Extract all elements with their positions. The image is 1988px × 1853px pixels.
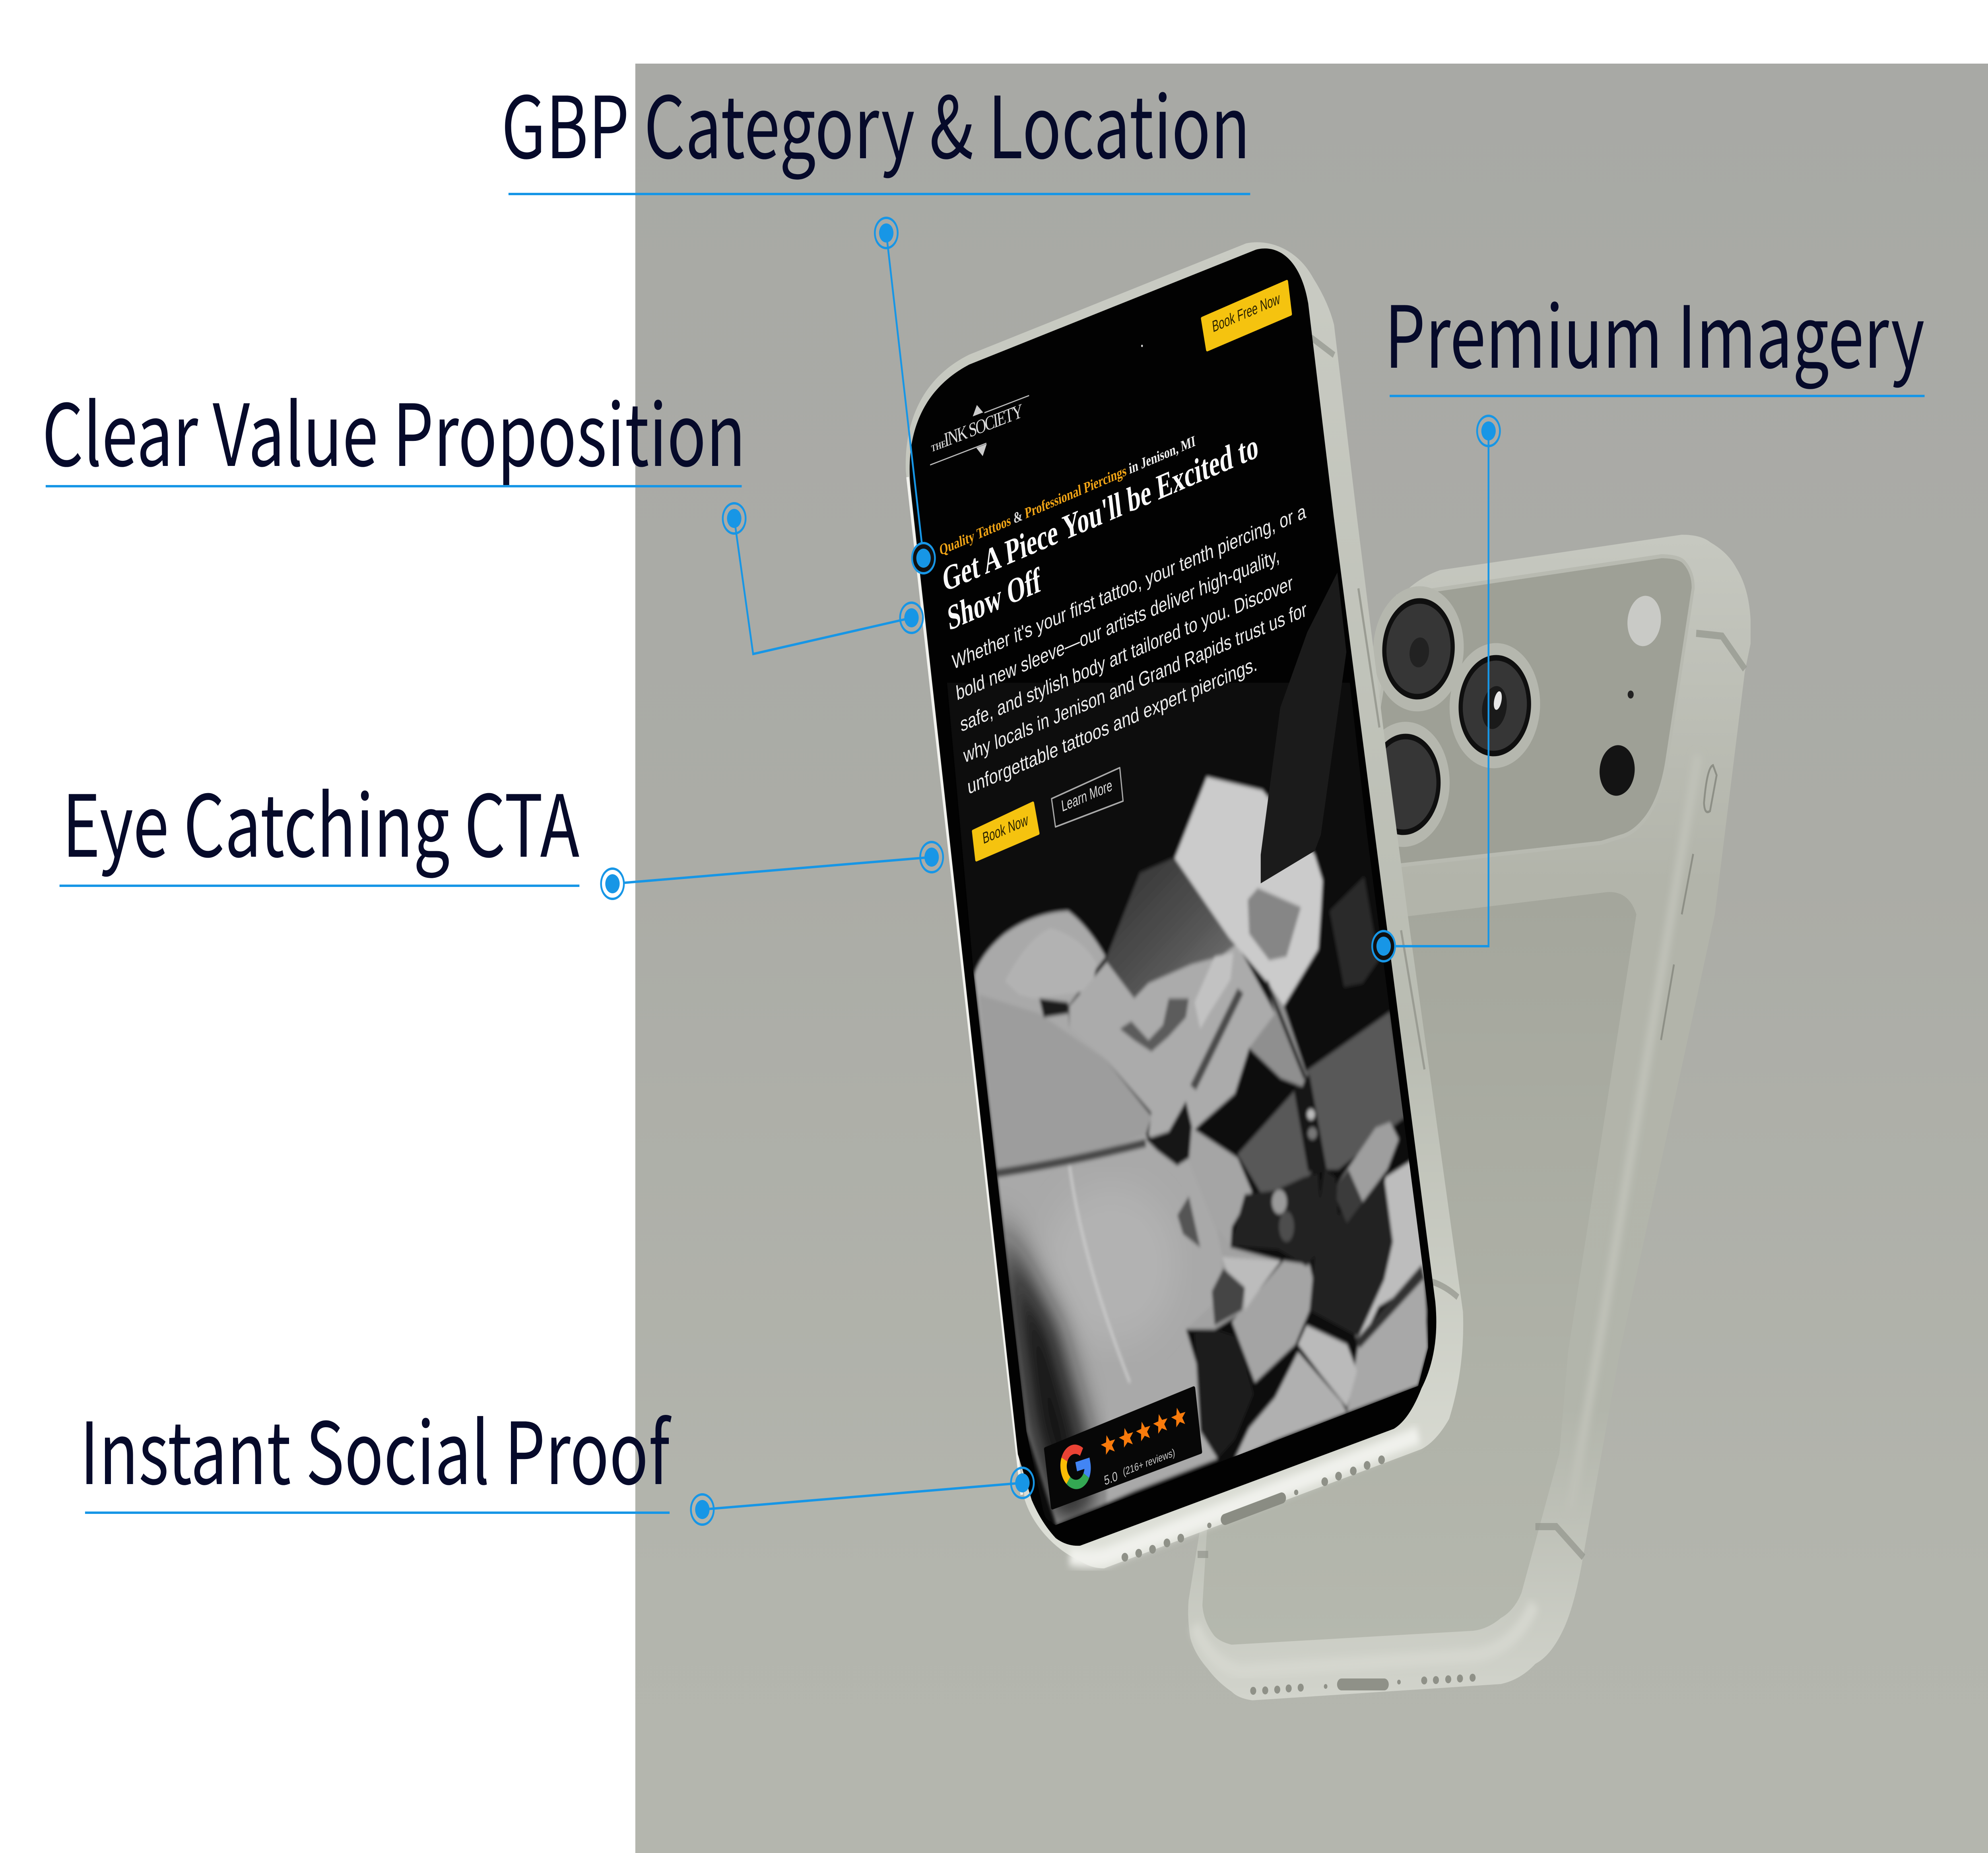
marker end [900,603,923,633]
front phone [906,242,1463,1568]
hoodie [974,911,1222,1525]
paragraph line 1: Whether it's your first tattoo, your tenth piercing, or a [951,499,1307,674]
marker end [912,543,935,573]
screen [910,248,1436,1546]
glove highlight [1272,1190,1287,1214]
callout: premium imagery [1372,269,1925,961]
antenna band [1311,338,1458,1297]
front phone frame [906,242,1463,1568]
logo rules [927,396,1033,465]
left frame highlight [908,477,1022,1495]
side button [1358,588,1379,728]
heading: premium imagery: Premium Imagery [1384,269,1925,392]
google review badge [1046,1388,1201,1508]
paragraph line 5: unforgettable tattoos and expert piercings. [966,652,1258,799]
hero paragraph [951,499,1308,799]
cap [1175,777,1322,1006]
hoodie seam [1070,1166,1130,1383]
table lower [1347,1276,1428,1413]
hero heading line 1: Get A Piece You'll be Excited to [940,426,1260,600]
marker end [920,842,943,872]
heading: GBP category and location: GBP Category & Location [501,59,1250,183]
paragraph line 3: safe, and stylish body art tailored to you. Discover [959,571,1294,736]
marker end [1372,931,1395,961]
button: book now [973,803,1038,860]
back phone body [1188,535,1751,1700]
button: book now: Book Now [982,811,1029,848]
collar gap [1039,998,1068,1017]
cord highlights [1307,1109,1315,1120]
camera dot [1141,345,1143,347]
connector line [702,1483,1022,1510]
heading: eye catching CTA: Eye Catching CTA [62,758,579,881]
tattoo machine [1337,1122,1399,1223]
marker start [691,1494,714,1525]
right frame highlight [1570,755,1698,1511]
ear [1194,953,1233,1029]
cups [1330,877,1378,987]
client arm [1232,1261,1314,1383]
underline [60,885,579,887]
back phone [1188,535,1751,1700]
sleeve [1189,1128,1252,1248]
hood fold line [996,1143,1145,1173]
machine grip [1337,1170,1363,1223]
shirt [1180,1162,1281,1329]
callout: eye catching CTA [60,758,943,899]
heading: instant social proof: Instant Social Proof [80,1385,672,1509]
camera plateau [1352,556,1693,871]
lower frame highlight [1195,1604,1534,1672]
cap logo [1248,888,1301,960]
eyebrow text: Quality Tattoos & Professional Piercings in Jenison, MI [939,433,1196,559]
callout: clear value proposition [42,367,923,654]
jaw tattoo [1193,991,1241,1088]
black arm of machine [1261,572,1346,883]
black sensor [1595,739,1639,801]
floor [1238,1012,1406,1192]
rating text: 5.0 [1103,1469,1118,1488]
front speaker and port [1122,1455,1385,1562]
connector line [612,857,932,884]
background panel [635,64,1988,1853]
lower sleeve [1235,1352,1347,1459]
hair [1105,858,1238,998]
button: learn more [1052,768,1123,827]
callout: GBP category and location [501,59,1250,573]
badge box [1046,1388,1201,1508]
back glass panel [1202,892,1637,1645]
marker start [875,218,898,248]
marker end [1011,1468,1034,1498]
five stars [1099,1405,1188,1456]
black cuff [1194,1329,1254,1459]
hoodie body highlight [1045,1185,1177,1345]
marker start [723,503,746,534]
paragraph line 4: why locals in Jenison and Grand Rapids trust us for [962,598,1308,767]
lens top [1362,572,1475,726]
shirt print [1177,1196,1200,1248]
bottom frame highlight [1070,1435,1419,1558]
heading: clear value proposition: Clear Value Proposition [42,367,746,491]
connector line [734,518,912,654]
button: book free now [1202,281,1291,350]
light shirt patch [1222,1257,1281,1310]
hero heading line 2: Show Off [945,560,1043,638]
review count: (216+ reviews) [1122,1446,1176,1479]
google logo [1061,1446,1091,1488]
beard [1145,1101,1193,1166]
table stripe [1355,1265,1425,1348]
cap bill edge [1266,981,1305,1078]
flash [1623,590,1666,652]
callout: instant social proof [80,1385,1034,1525]
window shape [967,424,1264,926]
connector line [886,233,924,558]
right glove [1310,1170,1393,1337]
dim studio background [933,531,1428,1525]
neck and face skin [1070,945,1275,1147]
back speaker and port [1250,1674,1475,1695]
marker start [1477,416,1500,446]
underline [85,1512,670,1514]
left glove [1231,1173,1321,1267]
antenna bands [1198,633,1745,1557]
button: learn more: Learn More [1060,776,1113,815]
microphone [1628,691,1634,699]
paragraph line 2: bold new sleeve—our artists deliver high-quality, [955,543,1281,705]
logo wordmark: INK SOCIETY [943,399,1024,451]
side buttons [1661,765,1716,1040]
logo small word: THE [931,438,947,454]
neck tattoo [1120,998,1189,1052]
machine cord [1294,1075,1327,1173]
lens middle [1439,629,1551,782]
logo [926,385,1034,476]
connector line [1384,431,1489,946]
hoodie dark shadow [996,1215,1097,1525]
hero photo [947,683,1428,1525]
marker start [601,869,624,899]
hero heading [940,426,1260,638]
logo ornaments [972,403,988,458]
inner sleeve [1212,1269,1245,1325]
hood inner [1005,928,1097,998]
cap bill [1249,981,1307,1087]
watch [1298,1325,1357,1407]
button: book free now: Book Free Now [1211,289,1281,336]
underline [509,193,1250,195]
paper [1355,1154,1428,1337]
underline [1390,395,1925,397]
hood front shading [979,995,1151,1170]
underline [46,485,742,487]
lens bottom [1348,708,1461,861]
